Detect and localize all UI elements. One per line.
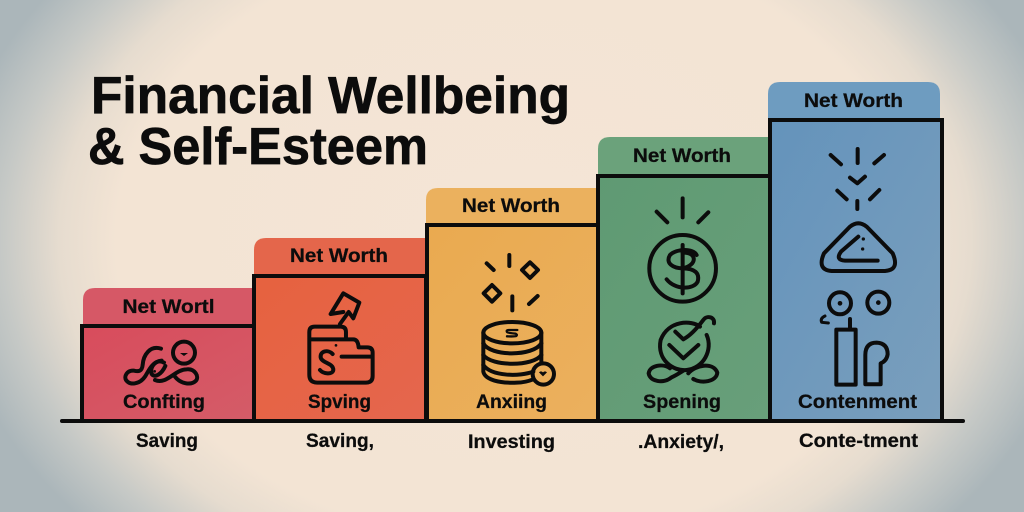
bar 5 xyxy=(770,120,942,421)
axis labels: Saving, xyxy=(306,431,374,452)
axis labels: Investing xyxy=(468,432,555,453)
panel: step 4 green xyxy=(598,137,770,421)
panel: step 1 red xyxy=(82,288,254,421)
bar label 4: Spening xyxy=(643,392,721,413)
bar label 2: Spving xyxy=(308,392,371,413)
axis labels: Saving xyxy=(136,431,198,452)
header label 5: Net Worth xyxy=(804,91,903,112)
bar 4 xyxy=(598,176,770,421)
title: Financial Wellbeing xyxy=(91,67,570,125)
panel: step 2 orange xyxy=(254,238,426,421)
bar 2 xyxy=(254,276,426,421)
header tab 4 xyxy=(598,137,770,176)
bar label 5: Contenment xyxy=(798,392,918,413)
bar 1 xyxy=(82,326,254,421)
bar label 1: Confting xyxy=(123,392,205,413)
bar 3 xyxy=(427,225,598,421)
panel: step 5 blue xyxy=(768,82,942,421)
bar label 3: Anxiing xyxy=(476,392,547,413)
header label 1: Net Wortl xyxy=(122,297,214,318)
title xyxy=(88,67,570,176)
icon: coin stack with sparkles xyxy=(483,255,554,385)
header label 3: Net Worth xyxy=(462,196,560,217)
icon: contentment symbols xyxy=(821,149,895,385)
header tab 2 xyxy=(254,238,426,276)
panel: step 3 yellow xyxy=(426,188,598,421)
header tab 5 xyxy=(768,82,940,120)
axis labels: .Anxiety/, xyxy=(638,432,724,453)
icon: wallet with arrow xyxy=(309,293,373,383)
icon: figure with loops xyxy=(125,342,197,384)
header label 4: Net Worth xyxy=(633,146,731,167)
header label 2: Net Worth xyxy=(290,246,388,267)
icon: dollar coin with check figure xyxy=(649,198,717,382)
axis labels xyxy=(136,431,919,453)
axis labels: Conte-tment xyxy=(799,431,919,452)
header tab 1 xyxy=(83,288,254,326)
title: & Self-Esteem xyxy=(88,118,428,176)
header tab 3 xyxy=(426,188,598,225)
baseline axis xyxy=(60,419,965,423)
